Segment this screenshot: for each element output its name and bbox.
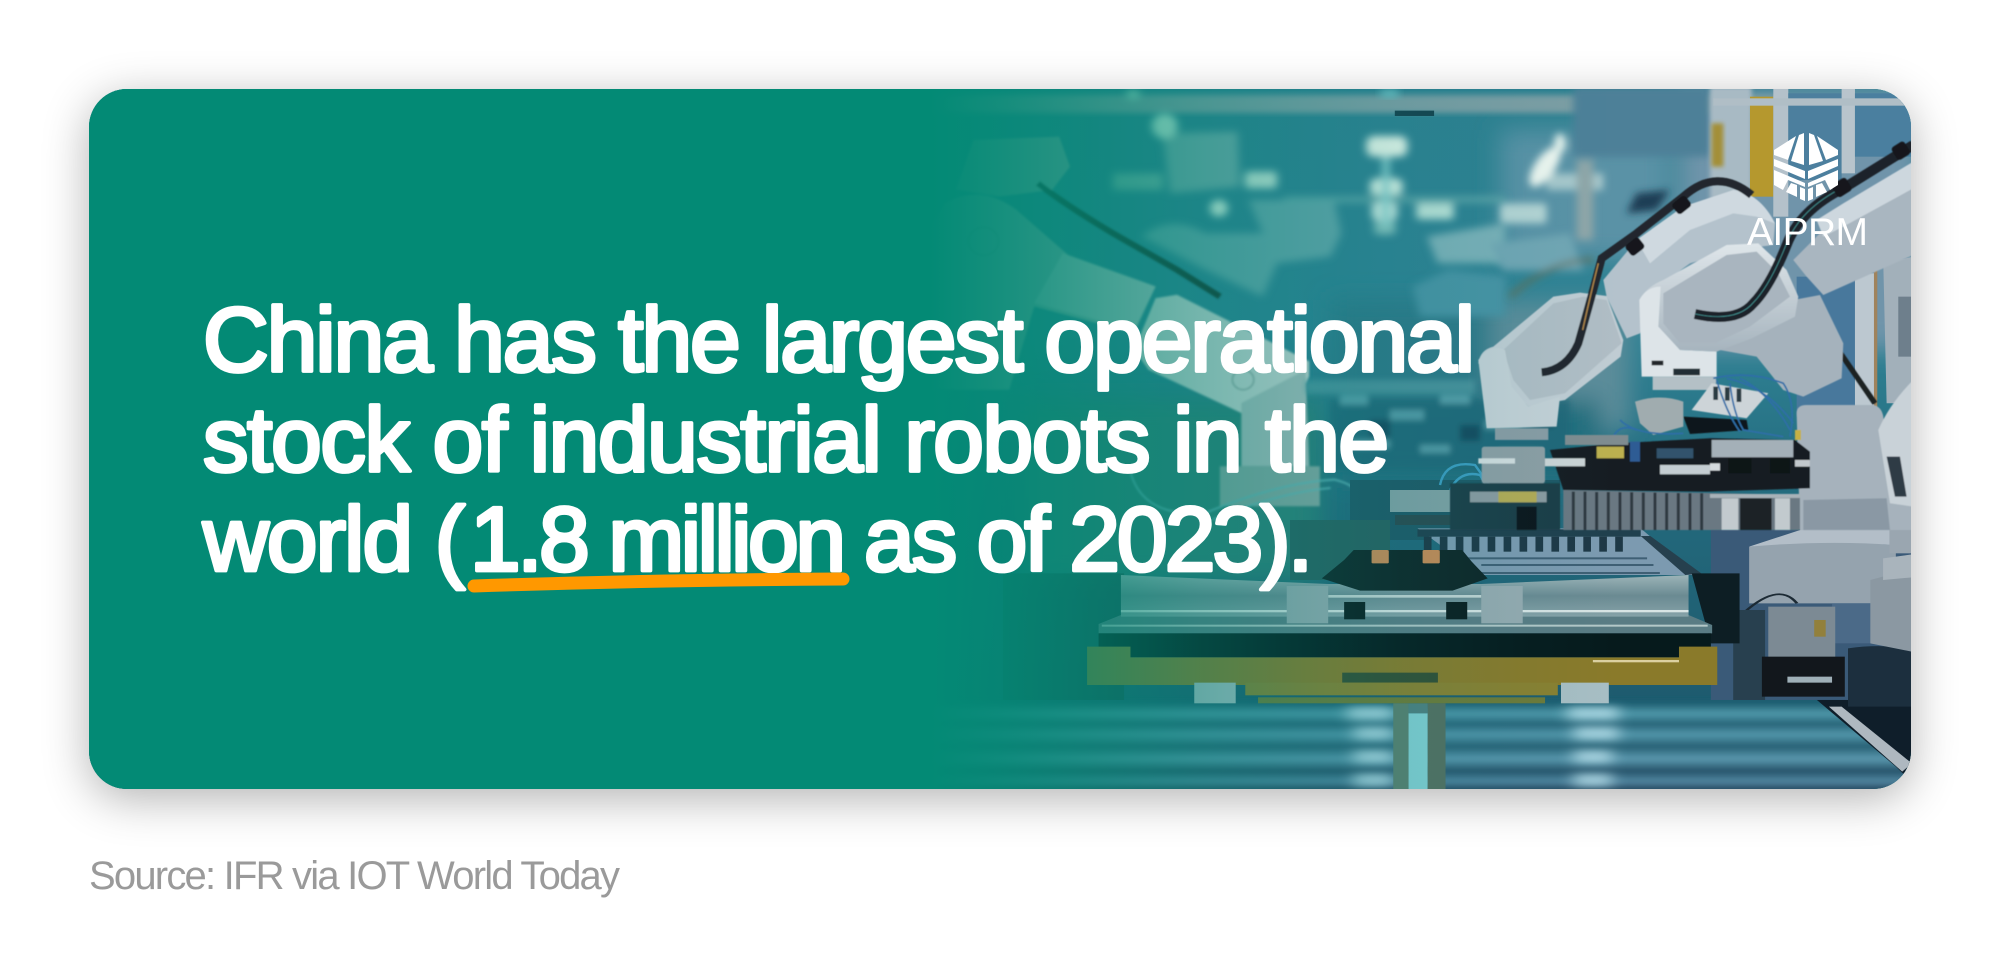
wordmark: AIPRM	[1747, 211, 1868, 254]
headline: world (	[202, 490, 465, 590]
photo: factory background	[89, 89, 1920, 789]
cylinder and valves	[1635, 397, 1683, 435]
tray body	[1099, 615, 1712, 633]
photo: white robot arms and gripper	[1450, 140, 1913, 530]
headline: China has the largest operational	[203, 290, 1475, 391]
photo: lower scene, tray and conveyor	[856, 500, 1940, 790]
centre arm lower link	[1720, 295, 1843, 397]
headline: as of 2023).	[864, 490, 1313, 590]
battery cover module	[1322, 550, 1488, 591]
black diagonal hose	[1838, 350, 1875, 403]
right arm	[1793, 165, 1913, 295]
logo: AIPRM	[1747, 133, 1868, 254]
icon: hexagon mark	[1774, 133, 1838, 201]
left lower machine	[1450, 483, 1560, 530]
photo: faded foreground left robot arm	[866, 137, 1363, 520]
back trays	[1417, 528, 1695, 575]
source note: Source: IFR via IOT World Today	[89, 854, 620, 898]
headline: stock of industrial robots in the	[203, 390, 1389, 491]
photo: mid-ground machine clutter	[1290, 380, 1570, 580]
photo: blurred lights and far robots	[1113, 90, 1505, 316]
orange underline	[474, 579, 843, 586]
right machinery	[1711, 530, 1921, 700]
gripper	[1550, 438, 1810, 492]
headline: 1.8 million	[470, 490, 846, 590]
centre arm upper link	[1639, 243, 1798, 352]
cables	[1695, 145, 1913, 317]
under-tray	[1099, 633, 1711, 657]
left arm upper link	[1603, 190, 1775, 338]
left arm base	[1478, 348, 1560, 428]
far-left dark side of tray	[1003, 573, 1124, 700]
photo: right upper blur, frame and columns	[1490, 87, 1913, 417]
grey pedestal	[1797, 405, 1913, 530]
conveyor	[856, 697, 1940, 790]
yellow carrier	[1087, 647, 1717, 685]
left arm lower link	[1478, 293, 1623, 407]
photo: green fade overlay	[89, 89, 1911, 789]
panel: photo card	[89, 89, 1911, 789]
headline	[202, 290, 1475, 590]
centre arm base	[1639, 287, 1717, 377]
battery stack	[1563, 490, 1800, 530]
